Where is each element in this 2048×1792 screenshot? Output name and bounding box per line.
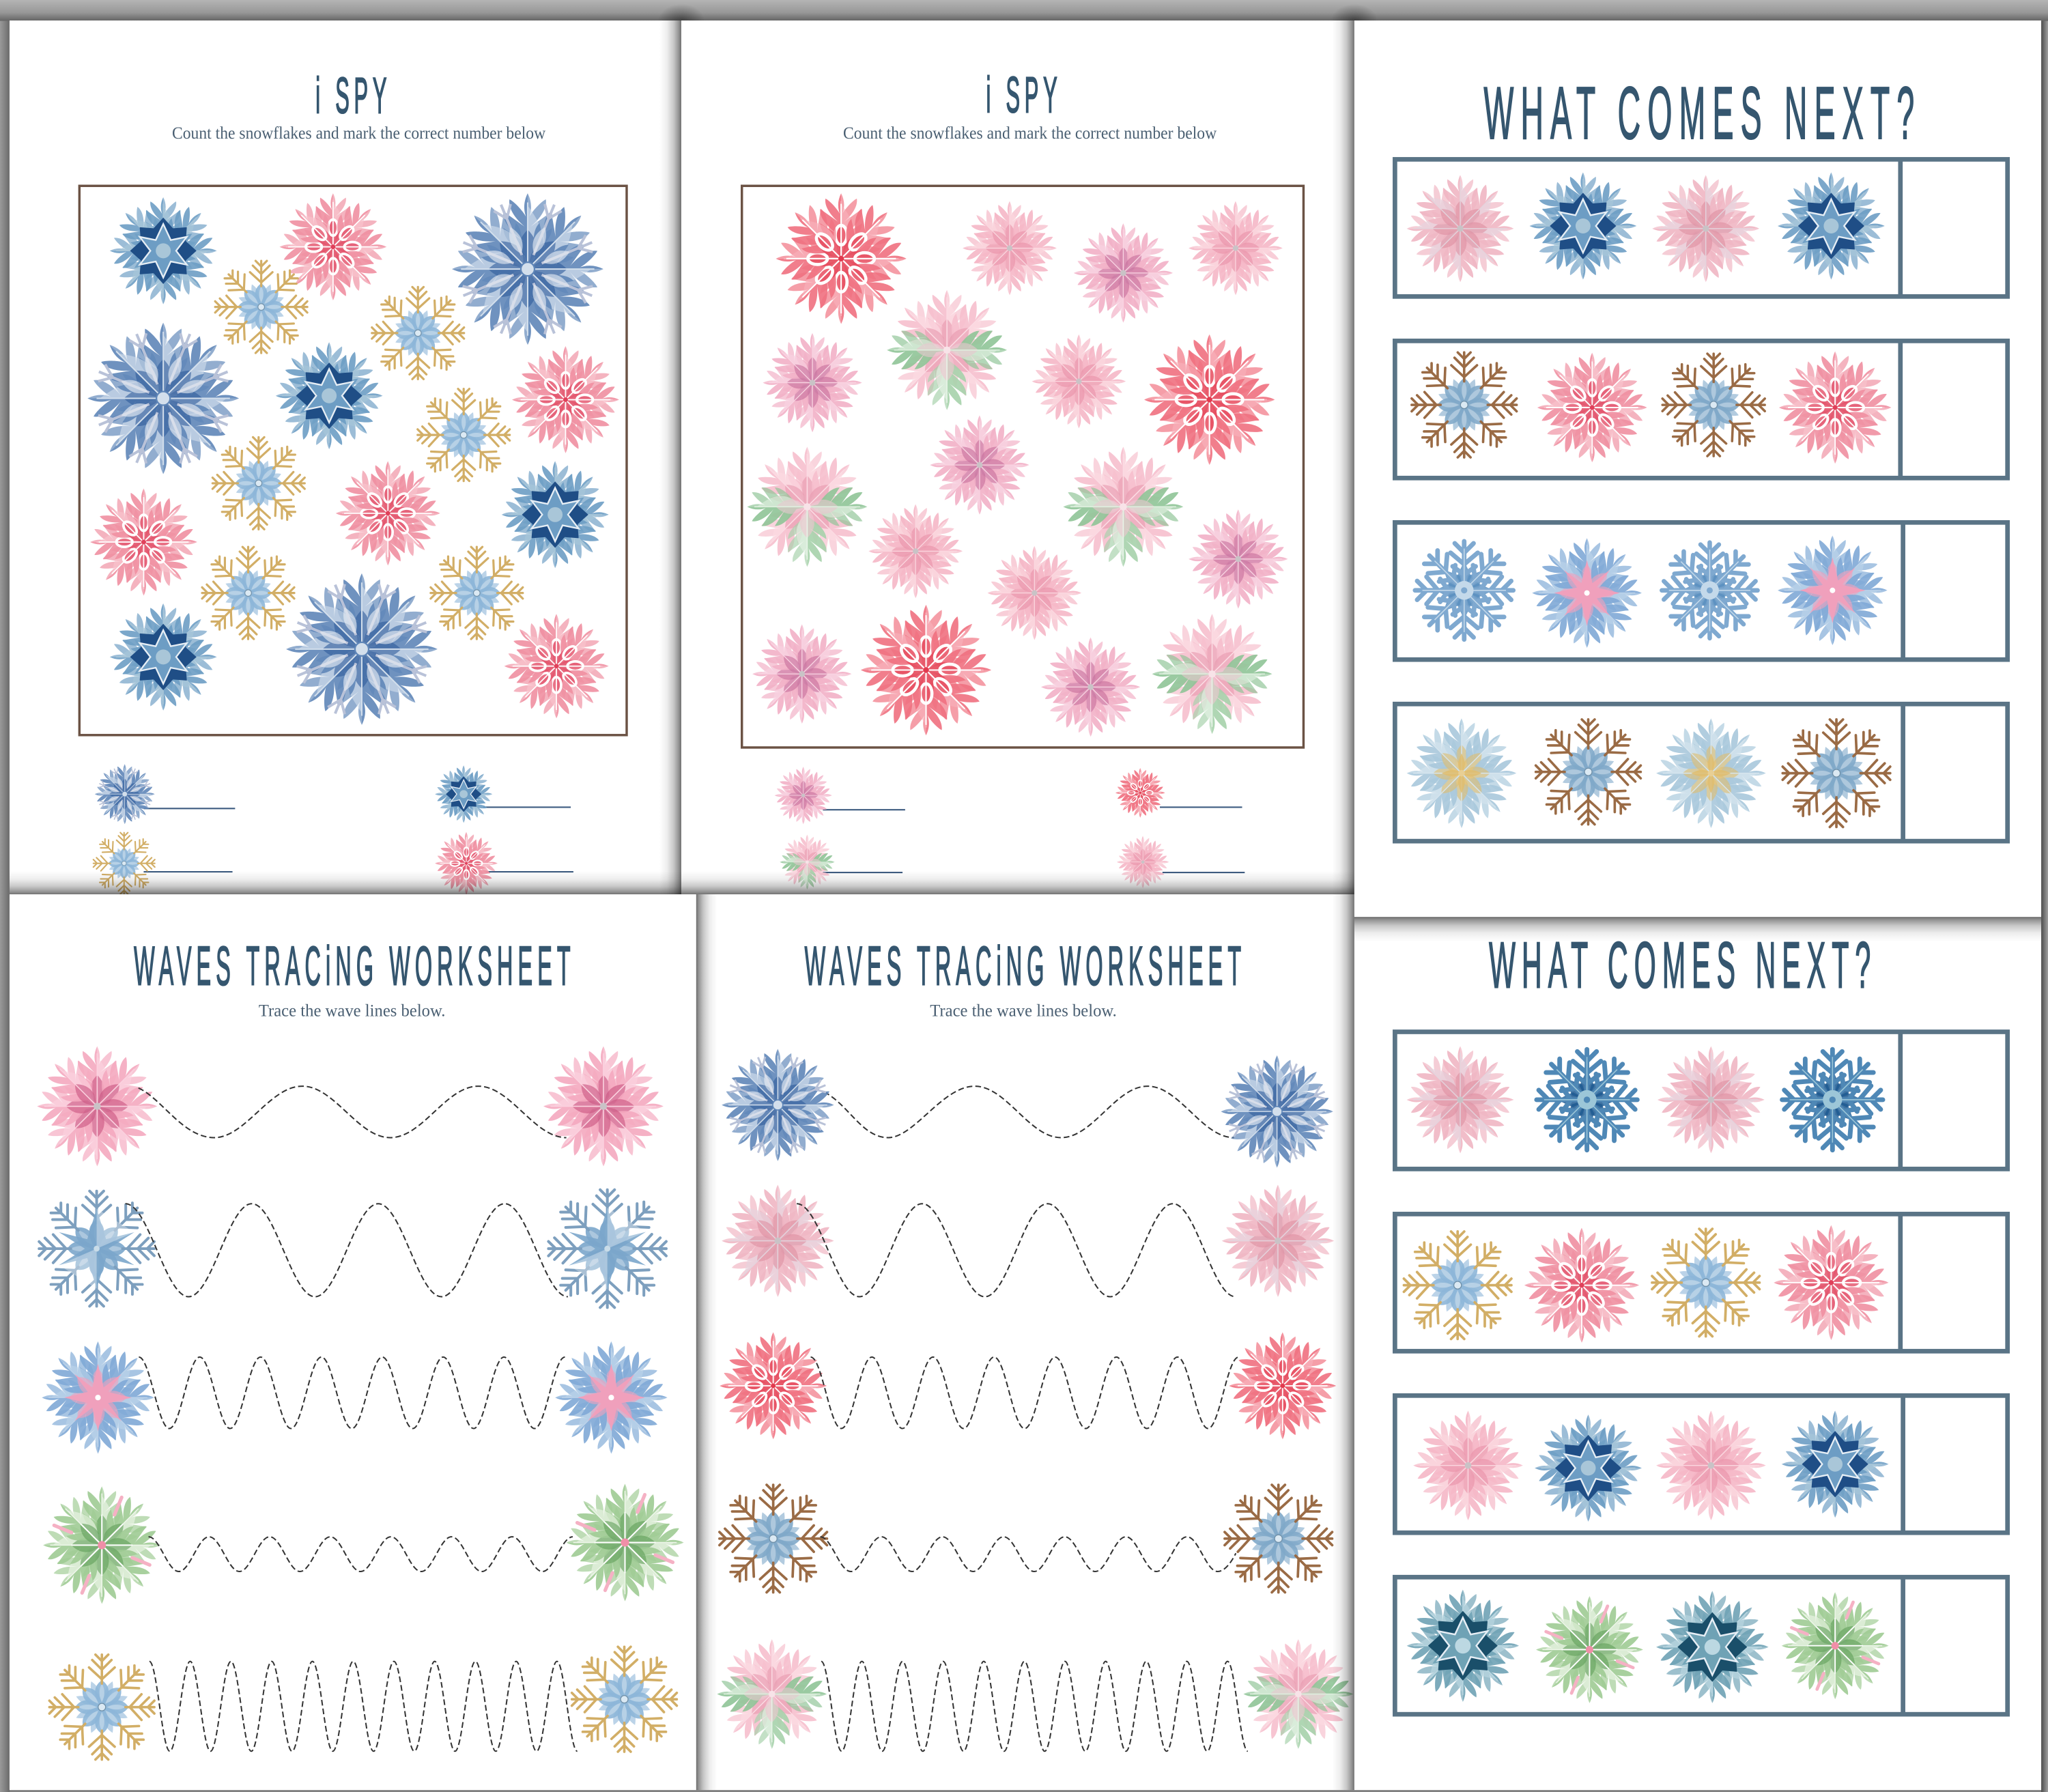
icon: snowflake [1656,718,1766,828]
icon: snowflake [1243,1639,1353,1749]
icon: snowflake [110,197,217,304]
icon: snowflake [1532,538,1642,648]
panel: waves tracing worksheet 1 [10,871,717,1790]
panel: what comes next worksheet 2 [1333,894,2041,1790]
icon: snowflake [1536,1596,1643,1703]
icon: snowflake [336,461,440,565]
icon: snowflake [763,333,862,432]
panel: i spy worksheet 2: i SPY [986,66,1062,124]
icon: snowflake [502,461,609,568]
icon: snowflake [747,446,867,567]
answer key [94,764,573,895]
icon: snowflake [1412,352,1517,457]
panel: waves tracing worksheet 2: WAVES TRACiNG WORKSHEET [805,936,1246,997]
icon: snowflake [512,346,619,453]
pattern row 4 [1395,704,2008,841]
icon: snowflake [1407,1047,1513,1153]
icon: snowflake [1656,1410,1766,1520]
icon: snowflake [930,415,1029,515]
icon: snowflake [1407,175,1513,282]
icon: snowflake [42,1341,154,1453]
icon: snowflake [90,489,197,595]
wave row 5 [717,1639,1353,1751]
wave row 4 [720,1485,1332,1593]
answer key [775,767,1245,890]
icon: snowflake [1524,1227,1639,1343]
panel: what comes next worksheet 1 [1333,20,2041,941]
icon: snowflake [1415,541,1513,640]
panel: waves tracing worksheet 2 [681,871,1355,1790]
icon: snowflake [1032,335,1126,429]
icon: snowflake [1229,1333,1336,1439]
icon: snowflake [504,614,609,718]
icon: snowflake [1413,1410,1523,1520]
icon: snowflake [861,605,991,735]
pattern row 4 [1395,1577,2008,1714]
icon: snowflake [752,625,851,724]
instruction text: Trace the wave lines below. [259,1002,445,1021]
icon: snowflake [775,767,832,824]
icon: snowflake [1537,353,1647,462]
icon: snowflake [1778,173,1885,279]
icon: snowflake [431,547,523,639]
icon: snowflake [1222,1184,1334,1297]
wave row 1 [722,1049,1333,1167]
icon: snowflake [110,603,217,711]
icon: snowflake [215,261,307,353]
icon: snowflake [1662,543,1758,638]
icon: snowflake [1782,720,1890,827]
icon: snowflake [868,504,963,598]
icon: snowflake [555,1341,668,1453]
icon: snowflake [372,287,464,379]
icon: snowflake [1144,335,1275,465]
icon: snowflake [212,437,304,529]
icon: snowflake [1779,352,1891,464]
icon: snowflake [717,1639,827,1749]
icon: snowflake [987,546,1081,640]
icon: snowflake [202,547,294,639]
icon: snowflake [1658,1047,1765,1153]
icon: snowflake [39,1191,154,1306]
icon: snowflake [1407,718,1516,828]
icon: snowflake [1537,1049,1637,1150]
icon: snowflake [1656,1591,1769,1703]
icon: snowflake [1774,1225,1889,1340]
icon: snowflake [720,1333,827,1439]
icon: snowflake [1782,1049,1883,1150]
pattern row 3 [1395,522,2008,659]
icon: snowflake [1063,446,1183,567]
icon: snowflake [435,765,492,823]
icon: snowflake [1117,836,1169,888]
icon: snowflake [1225,1485,1332,1593]
icon: snowflake [43,1486,160,1604]
pattern row 2 [1395,341,2008,478]
icon: snowflake [780,835,835,890]
panel: i spy worksheet 1 [10,20,689,895]
icon: snowflake [1535,1414,1642,1522]
icon: snowflake [1529,173,1636,279]
icon: snowflake [1189,509,1288,609]
icon: snowflake [548,1190,666,1307]
icon: snowflake [94,833,155,894]
wave row 2 [39,1190,666,1307]
icon: snowflake [1152,614,1272,734]
picture frame with snowflakes [742,186,1303,748]
icon: snowflake [1652,1229,1759,1337]
pattern row 1 [1395,159,2008,296]
icon: snowflake [87,323,239,474]
pattern row 3 [1395,1395,2008,1533]
icon: snowflake [720,1485,827,1593]
icon: snowflake [1782,1410,1889,1518]
icon: snowflake [566,1483,684,1602]
icon: snowflake [543,1047,664,1167]
icon: snowflake [1662,354,1765,456]
icon: snowflake [286,573,438,725]
icon: snowflake [887,290,1007,410]
icon: snowflake [435,832,498,895]
instruction text: Trace the wave lines below. [930,1002,1117,1021]
icon: snowflake [963,201,1057,295]
icon: snowflake [37,1047,157,1167]
icon: snowflake [418,389,510,481]
icon: snowflake [49,1655,154,1760]
icon: snowflake [776,193,907,324]
icon: snowflake [1407,1589,1519,1702]
instruction text: Count the snowflakes and mark the correct number below [843,124,1217,143]
icon: snowflake [1536,720,1640,825]
icon: snowflake [279,193,386,300]
icon: snowflake [722,1184,834,1297]
icon: snowflake [722,1049,834,1161]
icon: snowflake [452,193,603,345]
wave row 2 [722,1184,1334,1297]
icon: snowflake [1221,1055,1333,1167]
panel: waves tracing worksheet 1: WAVES TRACiNG WORKSHEET [134,936,575,997]
icon: snowflake [1041,638,1140,737]
icon: snowflake [95,764,155,824]
icon: snowflake [1189,201,1283,295]
wave row 3 [720,1333,1336,1439]
wave row 4 [43,1483,684,1604]
icon: snowflake [1404,1232,1511,1339]
wave row 3 [42,1341,668,1453]
icon: snowflake [276,342,383,449]
icon: snowflake [1778,535,1888,645]
icon: snowflake [1782,1592,1889,1699]
icon: snowflake [1652,175,1759,282]
instruction text: Count the snowflakes and mark the correct number below [172,124,545,143]
panel: i spy worksheet 1: i SPY [315,66,391,124]
icon: snowflake [1115,768,1165,818]
picture frame with snowflakes [79,186,627,735]
icon: snowflake [572,1647,677,1752]
wave row 1 [37,1047,664,1167]
pattern row 1 [1395,1032,2008,1169]
icon: snowflake [1074,223,1173,323]
panel: i spy worksheet 2 [659,20,1355,894]
wave row 5 [49,1647,677,1760]
pattern row 2 [1395,1214,2008,1351]
